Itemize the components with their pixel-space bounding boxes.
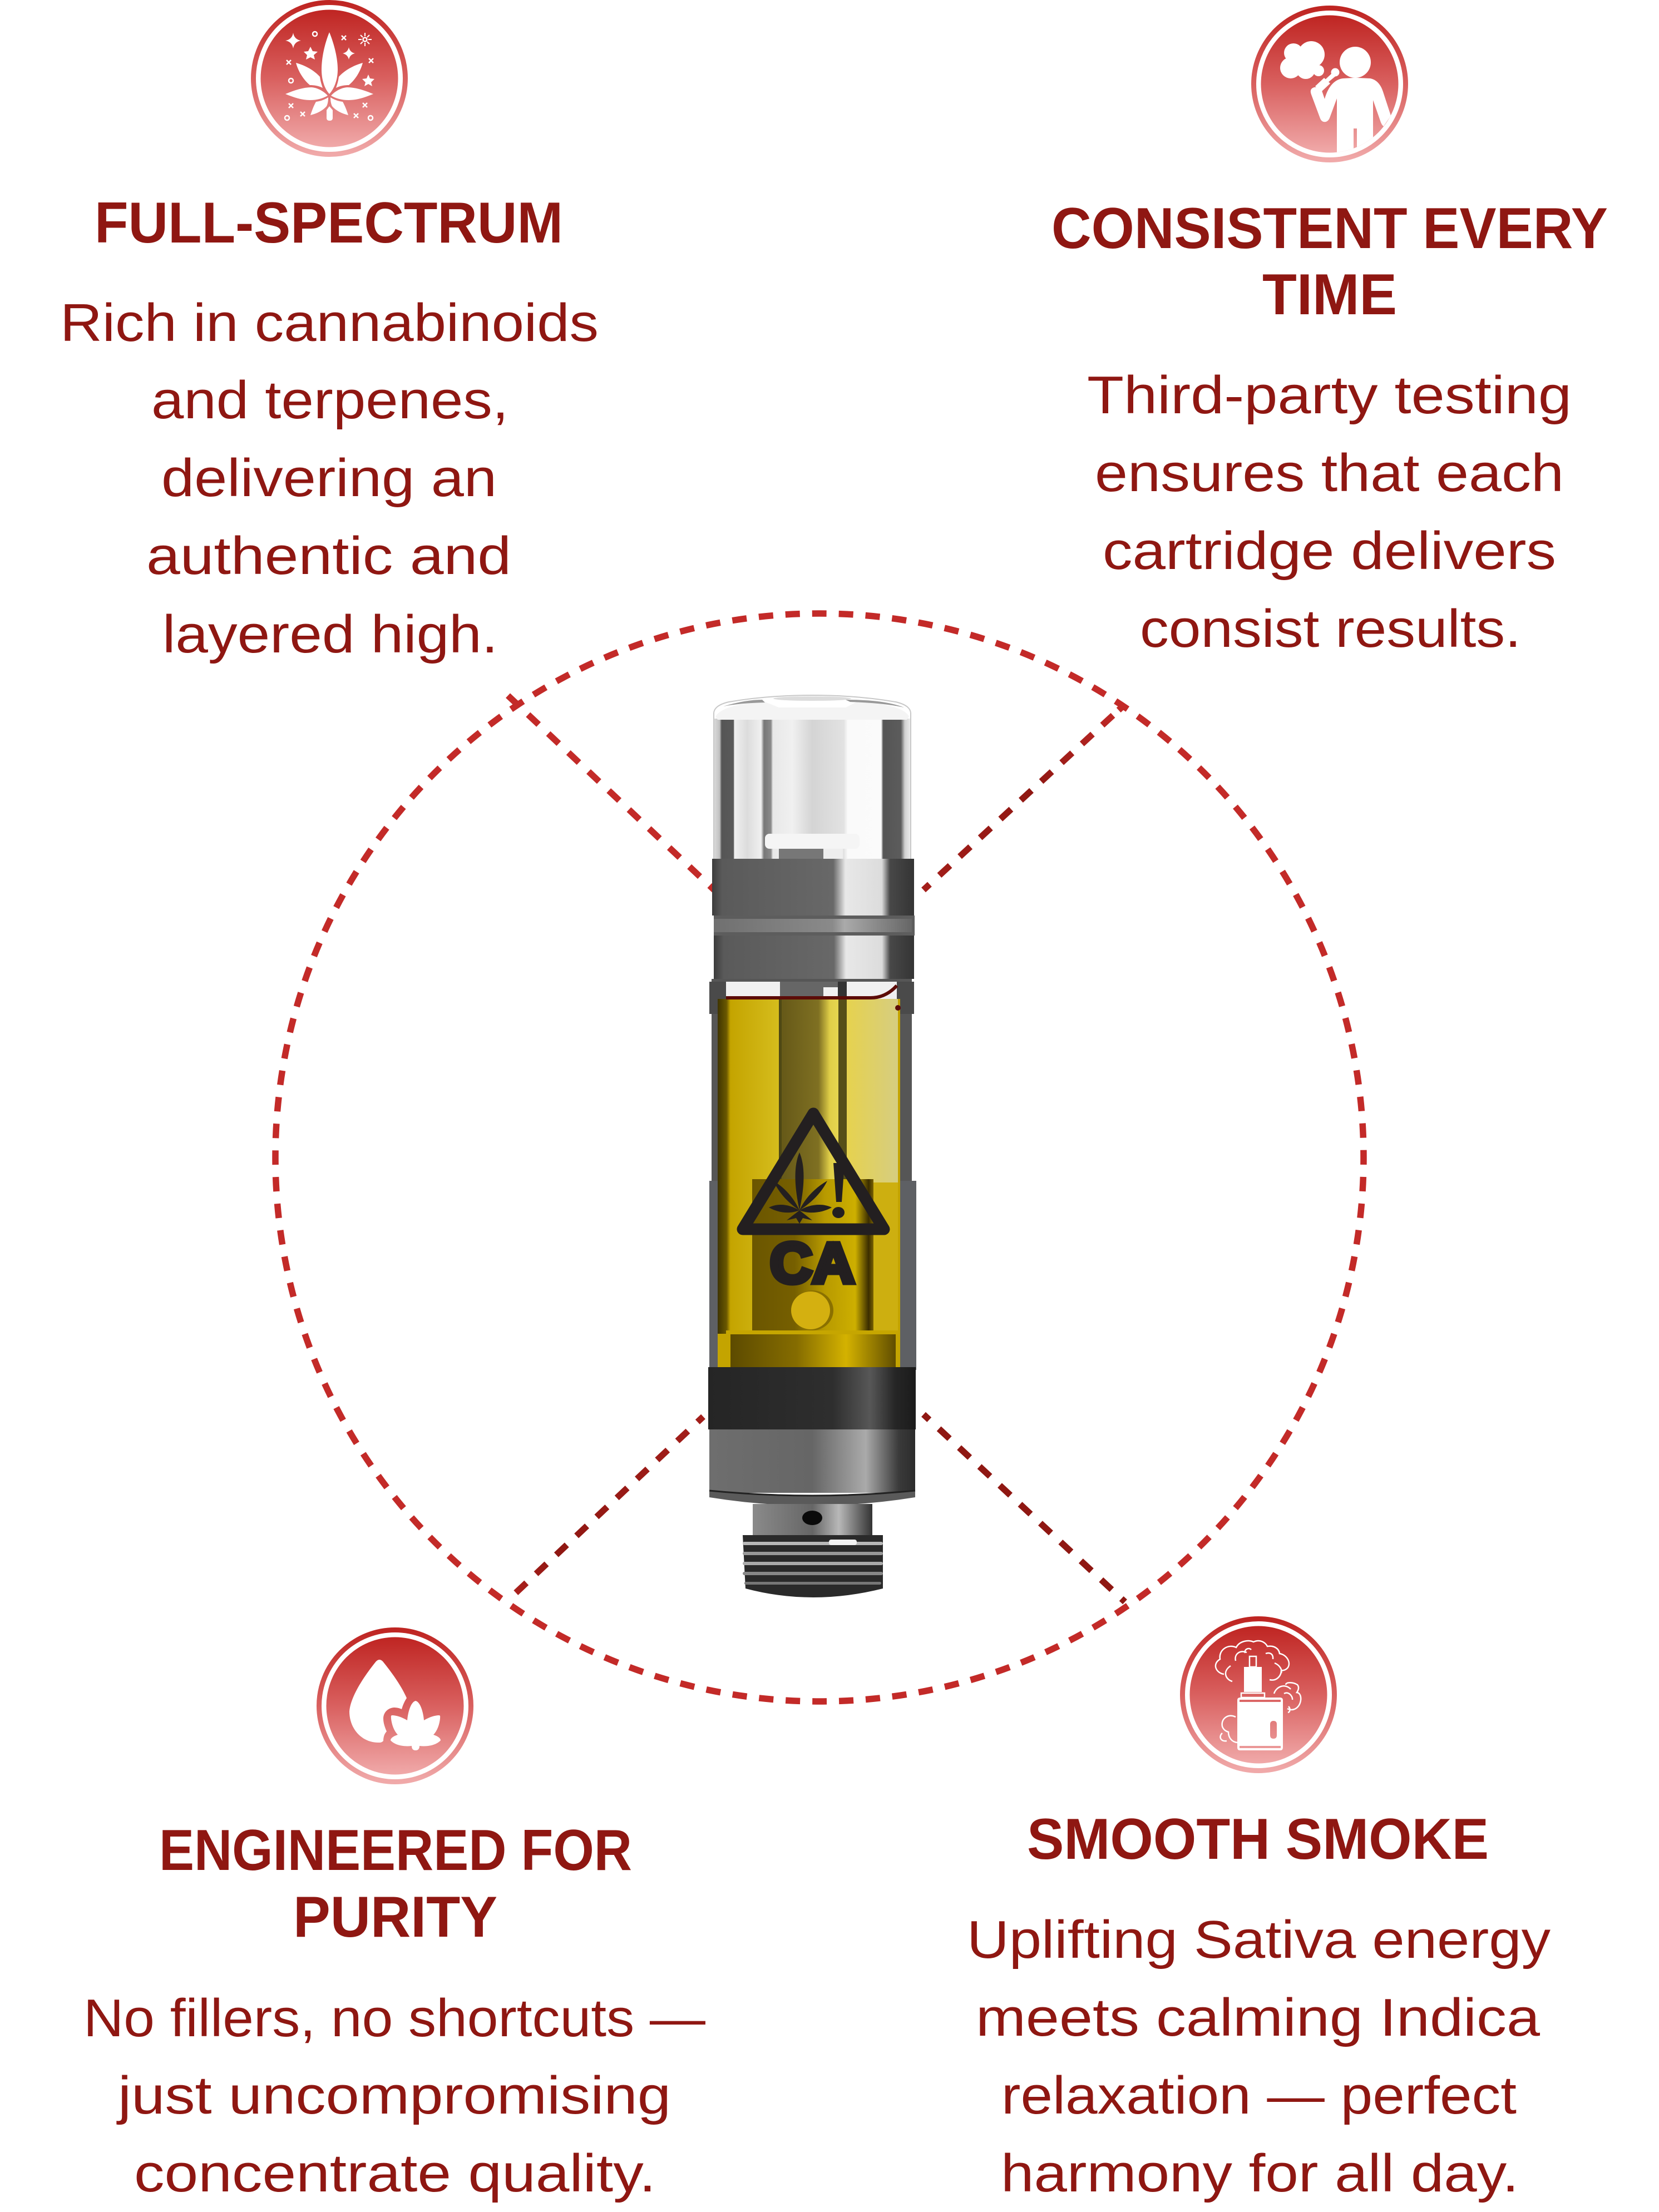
body text: and terpenes,: [151, 370, 508, 430]
connector: bottom right: [924, 1414, 1125, 1602]
body text: layered high.: [162, 605, 498, 664]
body text: delivering an: [161, 448, 497, 508]
body text: authentic and: [146, 526, 511, 586]
warning symbol: CA: [770, 1231, 855, 1295]
body text: [967, 1910, 1551, 2203]
heading: [1051, 196, 1608, 327]
body text: Uplifting Sativa energy: [967, 1910, 1551, 1969]
body text: Third-party testing: [1087, 365, 1572, 425]
body text: ensures that each: [1095, 443, 1564, 503]
metal collar: [712, 859, 915, 979]
heading: PURITY: [293, 1885, 497, 1949]
body text: harmony for all day.: [1001, 2144, 1519, 2203]
heading: FULL-SPECTRUM: [95, 191, 563, 255]
icon: person vaping: [1254, 8, 1405, 167]
connector: bottom left: [507, 1417, 703, 1601]
base: [708, 1367, 916, 1597]
product: vape cartridge: [708, 695, 916, 1597]
heading: SMOOTH SMOKE: [1027, 1807, 1489, 1872]
body text: Rich in cannabinoids: [60, 293, 599, 353]
warning symbol: [743, 1114, 884, 1295]
icon: cannabis leaf with sparkles: [254, 2, 405, 155]
oil tank: [709, 979, 916, 1370]
heading: TIME: [1262, 263, 1397, 327]
connector: top right: [924, 706, 1123, 890]
body text: concentrate quality.: [134, 2144, 656, 2203]
panel: full-spectrum: [60, 2, 599, 664]
panel: smooth smoke: [967, 1619, 1551, 2203]
body text: relaxation — perfect: [1001, 2066, 1517, 2125]
glass mouthpiece: [714, 695, 911, 859]
body text: cartridge delivers: [1103, 521, 1556, 581]
dashed circle: [275, 613, 1364, 1701]
panel: engineered for purity: [83, 1630, 705, 2203]
connector: top left: [508, 696, 718, 893]
heading: ENGINEERED FOR: [159, 1818, 632, 1883]
body text: No fillers, no shortcuts —: [83, 1988, 705, 2048]
icon: oil drop with leaf: [319, 1630, 471, 1782]
body text: [1087, 365, 1572, 659]
body text: just uncompromising: [116, 2066, 671, 2125]
panel: consistent every time: [1051, 8, 1608, 659]
body text: [60, 293, 599, 664]
body text: meets calming Indica: [976, 1988, 1540, 2047]
heading: [159, 1818, 632, 1949]
heading: CONSISTENT EVERY: [1051, 196, 1608, 261]
body text: [83, 1988, 705, 2203]
body text: consist results.: [1140, 599, 1521, 659]
icon: vape mod with smoke: [1183, 1619, 1334, 1771]
